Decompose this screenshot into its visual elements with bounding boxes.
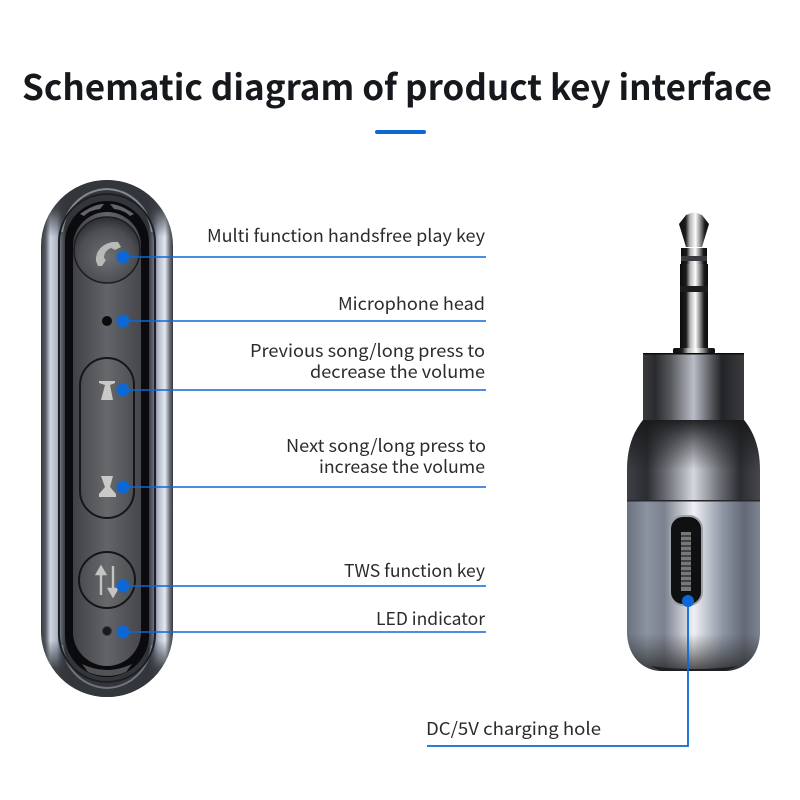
title: Schematic diagram of product key interface xyxy=(22,60,772,111)
callout: charging hole: DC/5V charging hole xyxy=(426,716,601,741)
plug tip xyxy=(679,212,709,247)
callout: LED indicator: LED indicator xyxy=(376,606,485,631)
callout: previous song xyxy=(116,338,486,396)
volume rocker key xyxy=(80,358,134,518)
device black inner frame xyxy=(65,201,149,677)
device metal shell xyxy=(41,180,173,697)
lower body xyxy=(627,500,760,671)
callout: multi function key: Multi function handsfree play key xyxy=(207,223,485,248)
LED indicator hole xyxy=(102,626,112,636)
plug shaft xyxy=(673,248,715,354)
plug collar xyxy=(643,353,744,423)
audio plug device xyxy=(627,212,760,671)
TWS button xyxy=(79,552,135,608)
device front panel xyxy=(73,204,141,676)
call button xyxy=(74,217,140,283)
upper body xyxy=(627,420,760,501)
icon: phone handset xyxy=(96,242,121,266)
callout: charging hole xyxy=(426,595,694,746)
icon: up and down arrows xyxy=(97,566,117,596)
callout: microphone head: Microphone head xyxy=(338,291,485,316)
USB-C charging port xyxy=(670,516,702,605)
callout: LED indicator xyxy=(116,606,486,638)
callout: previous song: Previous song/long press to xyxy=(250,338,485,363)
remote control device xyxy=(41,180,173,697)
callout: next song: Next song/long press to xyxy=(286,433,486,458)
icon: next song xyxy=(99,476,116,497)
callout: microphone head xyxy=(116,291,486,328)
callout: multi function key xyxy=(116,223,486,264)
callout: next song xyxy=(116,433,486,494)
callout: next song: increase the volume xyxy=(319,454,485,479)
callout: TWS function key: TWS function key xyxy=(344,558,485,583)
icon: previous song xyxy=(99,381,115,400)
callout: previous song: decrease the volume xyxy=(310,359,485,384)
microphone hole xyxy=(102,316,112,326)
callout: TWS function key xyxy=(116,558,486,592)
title accent bar xyxy=(375,130,426,134)
